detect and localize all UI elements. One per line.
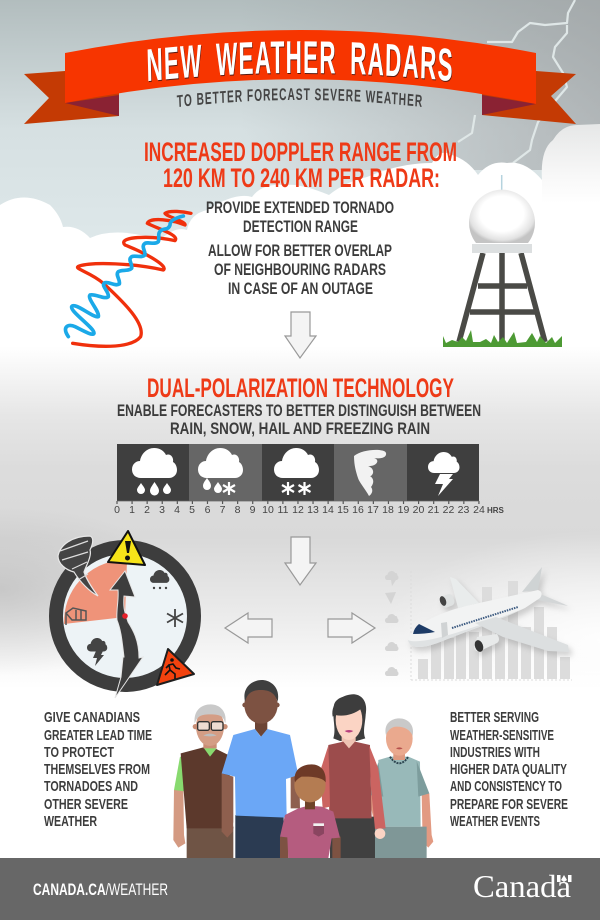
text: industries: WEATHER EVENTS bbox=[450, 813, 540, 830]
arrow: down 1 bbox=[285, 312, 316, 358]
heading: doppler range: 120 KM TO 240 KM PER RADAR: bbox=[163, 163, 440, 193]
doppler benefits text bbox=[206, 199, 394, 298]
doppler benefits text: PROVIDE EXTENDED TORNADO bbox=[206, 199, 394, 217]
timeline hours: 2 bbox=[144, 504, 150, 516]
dual polarization text bbox=[117, 402, 481, 438]
icon: radar tower bbox=[443, 175, 562, 347]
text: lead time: THEMSELVES FROM bbox=[44, 761, 150, 778]
person: woman bbox=[320, 694, 386, 858]
lead time dial bbox=[56, 531, 194, 698]
timeline hours: 6 bbox=[205, 504, 211, 516]
curved arrow bbox=[110, 571, 143, 698]
banner ribbon bbox=[24, 30, 576, 124]
doppler benefits text: IN CASE OF AN OUTAGE bbox=[228, 280, 373, 298]
subtitle: TO BETTER FORECAST SEVERE WEATHER bbox=[176, 88, 422, 107]
doppler benefits text: OF NEIGHBOURING RADARS bbox=[214, 261, 386, 279]
timeline hours: 22 bbox=[443, 504, 454, 516]
arrow: left bbox=[225, 613, 272, 643]
wordmark: Canada: Canada bbox=[473, 868, 571, 904]
footer link: CANADA.CA/WEATHER bbox=[33, 880, 168, 899]
red marker bbox=[122, 613, 128, 619]
doppler benefits text: DETECTION RANGE bbox=[243, 218, 358, 236]
timeline hours: 9 bbox=[250, 504, 256, 516]
arrow: right bbox=[328, 613, 375, 643]
text: lead time: OTHER SEVERE bbox=[44, 796, 128, 813]
person: older man bbox=[173, 704, 233, 858]
timeline hours: 14 bbox=[322, 504, 334, 516]
timeline hours: 18 bbox=[382, 504, 394, 516]
warning sector bbox=[64, 560, 127, 624]
text: lead time: GREATER LEAD TIME bbox=[44, 727, 152, 744]
icon: warning triangle bbox=[108, 531, 145, 565]
text: lead time: WEATHER bbox=[44, 813, 97, 830]
timeline hours: 20 bbox=[413, 504, 424, 516]
icon: tornado bbox=[354, 450, 386, 496]
timeline hours: 12 bbox=[292, 504, 304, 516]
doppler benefits text: ALLOW FOR BETTER OVERLAP bbox=[208, 242, 392, 260]
timeline hours: 19 bbox=[398, 504, 409, 516]
icon: snowflake bbox=[167, 609, 183, 627]
dual polarization text: RAIN, SNOW, HAIL AND FREEZING RAIN bbox=[170, 420, 430, 438]
timeline hours: 15 bbox=[337, 504, 349, 516]
person: older woman bbox=[368, 718, 433, 858]
icon: storm bbox=[87, 638, 107, 666]
icon: wind sensor bbox=[66, 608, 86, 625]
text: industries: INDUSTRIES WITH bbox=[450, 744, 540, 761]
timeline hours: 8 bbox=[235, 504, 241, 516]
timeline hours: 16 bbox=[352, 504, 364, 516]
person: man bbox=[222, 680, 300, 858]
title: NEW WEATHER RADARS bbox=[148, 41, 452, 82]
timeline hours: 0 bbox=[114, 504, 120, 516]
icon: airplane bbox=[408, 567, 569, 653]
person: boy bbox=[280, 764, 341, 858]
timeline hours: 11 bbox=[278, 504, 289, 516]
timeline hours: 17 bbox=[367, 504, 379, 516]
icon: tornado bbox=[58, 536, 98, 596]
text: lead time: TORNADOES AND bbox=[44, 778, 138, 795]
icon: run triangle bbox=[157, 649, 194, 685]
timeline hours: 21 bbox=[428, 504, 439, 516]
text: industries: BETTER SERVING bbox=[450, 709, 539, 726]
weather timeline strip bbox=[116, 444, 480, 502]
timeline hours: 13 bbox=[307, 504, 319, 516]
timeline hours: 23 bbox=[458, 504, 469, 516]
text: lead time bbox=[44, 709, 152, 830]
icon: radar waves bbox=[66, 211, 191, 346]
icon: rain cloud bbox=[132, 448, 177, 496]
text: industries bbox=[450, 709, 568, 830]
timeline hours: 1 bbox=[129, 504, 135, 516]
icon: rain cloud bbox=[150, 570, 169, 589]
heading: doppler range bbox=[144, 137, 457, 193]
icon: snow cloud bbox=[274, 448, 319, 495]
timeline hours: 7 bbox=[220, 504, 226, 516]
family illustration bbox=[173, 680, 433, 858]
timeline hours: 4 bbox=[174, 504, 180, 516]
timeline hours: 5 bbox=[189, 504, 195, 516]
timeline hours bbox=[114, 504, 505, 516]
chart weather icons bbox=[385, 571, 398, 676]
timeline hours: HRS bbox=[487, 506, 505, 515]
text: lead time: GIVE CANADIANS bbox=[44, 709, 140, 726]
icon: mixed precipitation cloud bbox=[198, 448, 243, 495]
timeline axis bbox=[116, 501, 480, 502]
timeline hours: 24 bbox=[473, 504, 485, 516]
dual polarization text: ENABLE FORECASTERS TO BETTER DISTINGUISH BETWEEN bbox=[117, 402, 481, 420]
bar chart bbox=[418, 581, 570, 679]
timeline hours: 3 bbox=[159, 504, 165, 516]
text: lead time: TO PROTECT bbox=[44, 744, 114, 761]
arrow: down 2 bbox=[285, 537, 316, 585]
icon: lightning cloud bbox=[428, 452, 460, 496]
plane over chart bbox=[385, 567, 572, 680]
footer bar bbox=[0, 858, 600, 920]
timeline hours: 10 bbox=[262, 504, 274, 516]
chart axes bbox=[411, 571, 572, 680]
